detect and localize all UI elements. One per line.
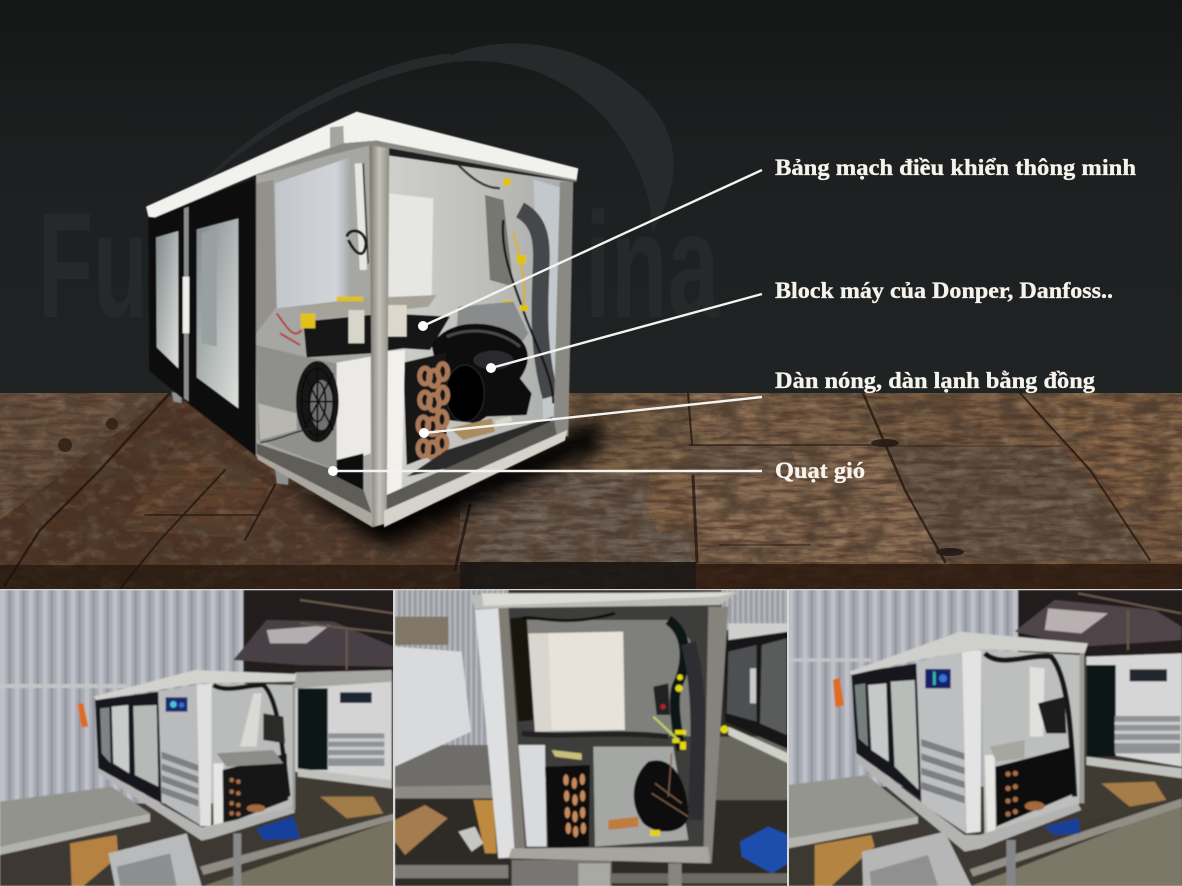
- photo 3: angled view in workshop: [788, 590, 1182, 886]
- brand watermark text, left part: Fu: [38, 182, 148, 350]
- floor: [199, 813, 393, 886]
- white shelf left: [395, 647, 471, 767]
- open cabinet: [470, 592, 738, 863]
- ceiling: [233, 590, 395, 673]
- wood grain texture: [0, 393, 1182, 564]
- brand watermark text, right part: ina: [585, 182, 721, 349]
- steel table: [788, 775, 918, 848]
- callout: fan pointer: [328, 466, 762, 476]
- blue crate: [1045, 818, 1080, 835]
- photo 2: rear machine bay close-up: [395, 590, 790, 886]
- copper condenser coil: [403, 353, 553, 477]
- right interior bay: [387, 155, 572, 513]
- wood cracks: [5, 393, 1150, 589]
- unit body: [77, 670, 297, 841]
- lower rail: [395, 860, 790, 886]
- boxes: [815, 782, 1166, 886]
- panel: rustic wooden table: [0, 393, 1182, 589]
- label: control board: Bảng mạch điều khiển thông minh: [775, 155, 1136, 180]
- photo 1: side view in workshop: [0, 590, 395, 886]
- compressor block: [432, 324, 532, 423]
- callout lines with dots: [328, 170, 762, 476]
- counter legs: [172, 392, 288, 485]
- steel table: [0, 787, 150, 855]
- callout: control board pointer: [418, 170, 762, 331]
- control board: [298, 295, 450, 357]
- left interior bay: [256, 143, 375, 525]
- main refrigerated counter, opened: [146, 112, 578, 527]
- unit body: [833, 632, 1088, 852]
- label: copper coils: Dàn nóng, dàn lạnh bằng đồng: [775, 368, 1096, 393]
- callout: coil pointer: [419, 397, 762, 438]
- white worktop: [146, 112, 578, 217]
- callout: compressor pointer: [486, 294, 762, 373]
- floor: [969, 798, 1182, 886]
- table shadow under unit: [280, 415, 605, 548]
- black door right: [725, 623, 790, 763]
- label: compressor: Block máy của Donper, Danfoss..: [775, 278, 1113, 303]
- brand watermark swoosh: [140, 43, 674, 262]
- ceiling: [1015, 590, 1182, 657]
- wood planks: [0, 393, 1182, 589]
- blue crate: [257, 817, 300, 840]
- panel: dark upper backdrop: [0, 0, 1182, 394]
- fan unit: [260, 357, 371, 490]
- rear unit: [1086, 653, 1182, 778]
- wood front edge shadow: [0, 562, 1182, 589]
- boxes: [70, 797, 383, 886]
- glass doors: [148, 178, 256, 456]
- feature labels: [775, 155, 1136, 483]
- label: fan: Quạt gió: [775, 458, 865, 483]
- cardboard: [395, 800, 788, 873]
- rear unit: [295, 670, 392, 788]
- aluminium front frame: [257, 145, 573, 527]
